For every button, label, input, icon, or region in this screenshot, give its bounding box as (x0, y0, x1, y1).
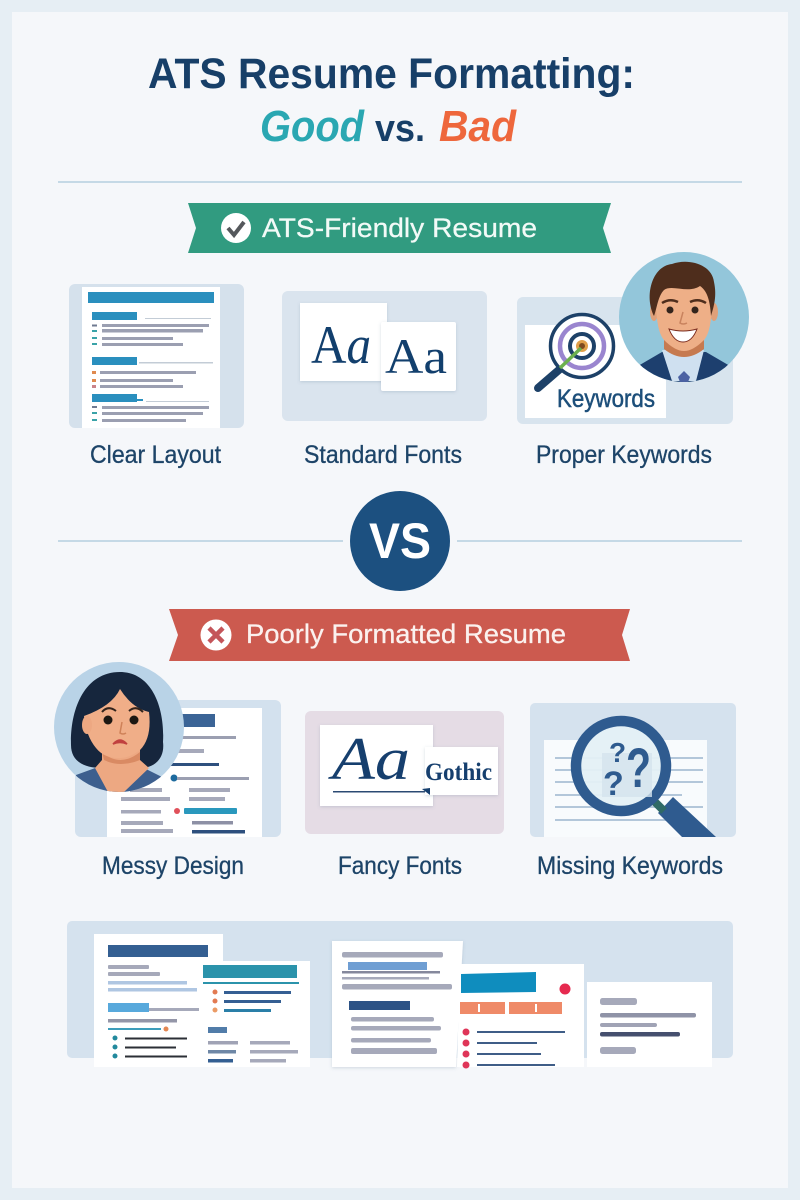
gothic font card (422, 747, 498, 795)
gothic font card: Gothic (425, 759, 492, 786)
font sample card: serif italic: Aa (311, 315, 371, 375)
banner: ATS-friendly resume (188, 203, 611, 253)
resume example 2 (200, 961, 310, 1067)
vs divider: VS (369, 513, 431, 569)
icon: magnifying glass with question marks: ? (626, 736, 651, 799)
label: clear layout: Clear Layout (90, 441, 221, 469)
banner: poorly formatted resume (169, 609, 630, 661)
panel: fancy fonts (305, 711, 504, 834)
font sample card: serif (381, 322, 456, 391)
title: ATS Resume Formatting: (148, 50, 635, 98)
label: messy design: Messy Design (102, 852, 244, 880)
resume example 4 (457, 964, 584, 1068)
icon: magnifying glass with question marks (576, 721, 716, 837)
panel: missing keywords (530, 703, 736, 837)
icon: check mark (221, 213, 251, 243)
messy resume document (107, 708, 262, 837)
icon: target magnifier (538, 314, 614, 388)
title: Good (260, 102, 365, 151)
panel: standard fonts (282, 291, 487, 421)
title: vs. (375, 108, 425, 150)
panel: proper keywords (517, 252, 749, 424)
font sample card: serif: Aa (385, 328, 447, 384)
label: standard fonts: Standard Fonts (304, 441, 462, 469)
banner label: bad: Poorly Formatted Resume (246, 619, 566, 649)
panel: clear layout (69, 284, 244, 428)
icon: magnifying glass with question marks: ? (609, 737, 626, 768)
resume example 1 (94, 934, 223, 1067)
avatar: smiling man (619, 252, 749, 390)
icon: cross mark (200, 620, 232, 650)
title: Bad (439, 102, 517, 151)
script font card: Aa (327, 726, 410, 792)
panel: resume examples (67, 921, 733, 1068)
vs divider (58, 491, 742, 591)
resume document: clear layout (82, 287, 220, 428)
banner label: good: ATS-Friendly Resume (262, 213, 537, 243)
label: proper keywords: Proper Keywords (536, 441, 712, 469)
icon: magnifying glass with question marks: ? (603, 765, 624, 803)
label: fancy fonts: Fancy Fonts (338, 852, 462, 880)
resume example 3 (332, 941, 463, 1067)
keyword label: Keywords (557, 385, 655, 413)
script font card (320, 725, 433, 806)
font sample card: serif italic (300, 303, 387, 381)
title (148, 50, 635, 151)
resume example 5 (587, 982, 712, 1067)
avatar: worried woman (54, 662, 184, 800)
panel: messy design (54, 662, 281, 837)
label: missing keywords: Missing Keywords (537, 852, 723, 880)
